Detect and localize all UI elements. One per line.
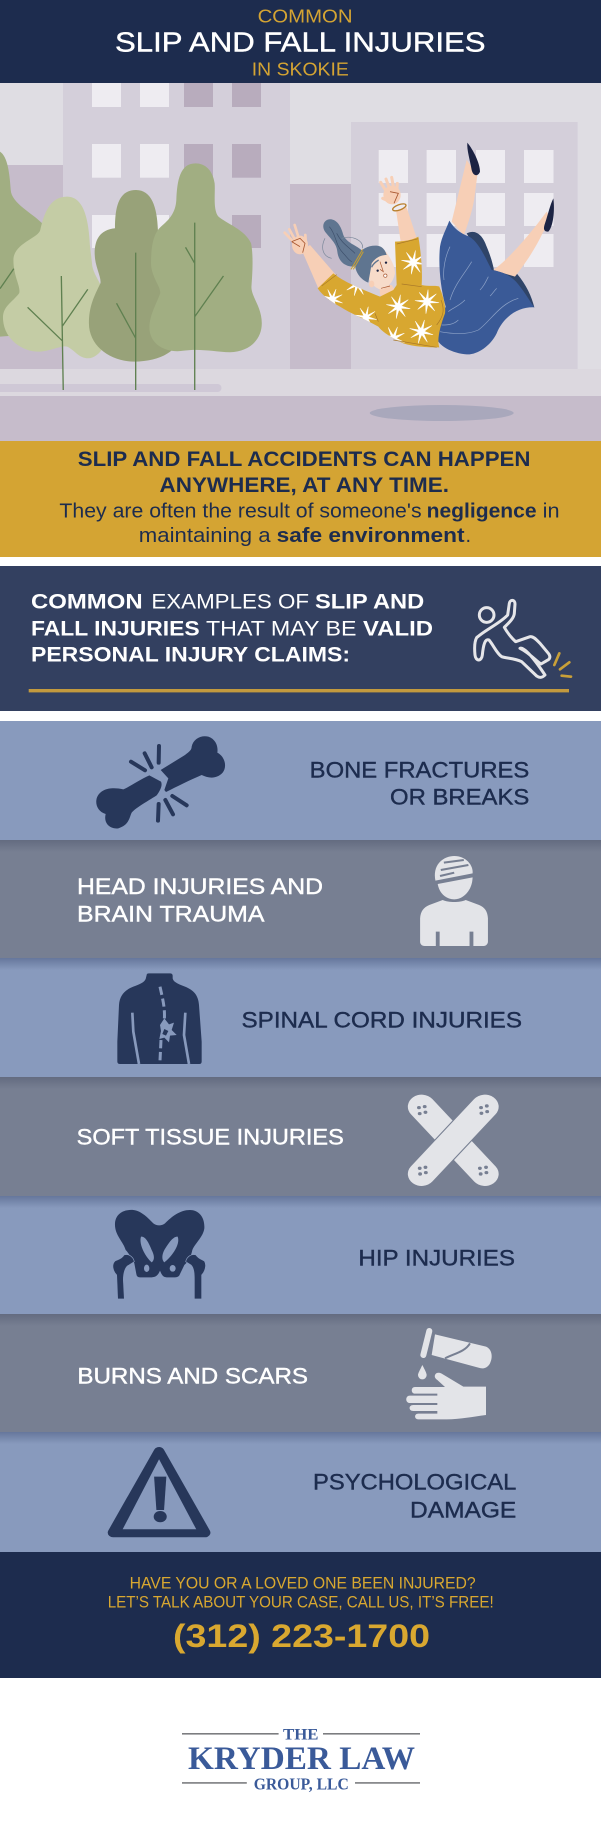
statement body: safe environment [277, 525, 465, 547]
statement heading: SLIP AND FALL ACCIDENTS CAN HAPPEN [78, 448, 531, 471]
label: BURNS AND SCARS [77, 1363, 308, 1388]
intro heading: COMMON [31, 591, 143, 614]
row: hip injuries [0, 1196, 601, 1314]
title line: in skokie: IN SKOKIE [252, 59, 349, 80]
statement body: negligence [427, 500, 537, 522]
intro heading [31, 591, 433, 667]
label: BRAIN TRAUMA [77, 902, 265, 927]
buildings [0, 83, 578, 369]
icon: warning triangle [113, 1452, 205, 1533]
statement body: maintaining a [139, 525, 272, 547]
icon: crossed bandages [417, 1104, 489, 1176]
torso, head and lowered arm [285, 219, 445, 354]
label: BONE FRACTURES [310, 758, 529, 783]
icon: chemical on hand [406, 1331, 492, 1419]
intro heading: EXAMPLES OF [151, 591, 309, 614]
icon: pelvis [113, 1210, 206, 1299]
falling woman [285, 143, 554, 354]
sidewalk and road [0, 369, 601, 441]
statement body [59, 500, 560, 547]
logo: THE [283, 1726, 318, 1743]
label: SOFT TISSUE INJURIES [77, 1124, 344, 1149]
gold statement panel [0, 441, 601, 557]
row: bone fractures [0, 721, 601, 840]
icon: bandaged head [420, 856, 488, 946]
icon: person slipping [475, 600, 571, 677]
row: head injuries [0, 840, 601, 958]
statement heading [78, 448, 531, 497]
legs, skirt and raised arm [381, 143, 554, 354]
label: OR BREAKS [390, 785, 529, 810]
phone number: (312) 223-1700 [173, 1618, 430, 1654]
label: DAMAGE [410, 1498, 516, 1523]
icon: injured back [117, 973, 202, 1064]
label: PSYCHOLOGICAL [313, 1470, 516, 1495]
title banner [0, 0, 601, 83]
statement body: They are often the result of someone's [59, 500, 422, 522]
statement body: . [466, 525, 471, 547]
row: soft tissue injuries [0, 1077, 601, 1196]
logo: GROUP, LLC [254, 1774, 349, 1793]
call to action text [108, 1574, 494, 1611]
logo [182, 1726, 420, 1793]
intro heading: VALID [363, 618, 433, 641]
intro heading: FALL INJURIES [31, 618, 200, 641]
navy intro panel [0, 566, 601, 711]
intro heading: THAT MAY BE [206, 618, 356, 641]
trees [0, 152, 262, 390]
row: burns and scars [0, 1314, 601, 1432]
illustration: city street with falling woman [0, 83, 601, 441]
intro heading: SLIP AND [315, 591, 424, 614]
logo: KRYDER LAW [188, 1741, 415, 1777]
title line: common: COMMON [258, 6, 353, 27]
icon: broken bone [96, 736, 225, 828]
intro heading: PERSONAL INJURY CLAIMS: [31, 644, 350, 667]
call to action text: HAVE YOU OR A LOVED ONE BEEN INJURED? [130, 1574, 476, 1592]
row: psychological damage [0, 1432, 601, 1552]
statement heading: ANYWHERE, AT ANY TIME. [160, 474, 449, 497]
label: HEAD INJURIES AND [77, 874, 323, 899]
label: SPINAL CORD INJURIES [242, 1008, 522, 1033]
label [310, 758, 529, 810]
call to action text: LET’S TALK ABOUT YOUR CASE, CALL US, IT’S FREE! [108, 1593, 494, 1611]
row: spinal cord injuries [0, 958, 601, 1077]
label: HIP INJURIES [358, 1246, 515, 1271]
footer call to action [0, 1552, 601, 1678]
statement body: in [543, 500, 560, 522]
title line: slip and fall injuries: SLIP AND FALL INJURIES [115, 26, 486, 57]
label [313, 1470, 516, 1523]
label [77, 874, 323, 927]
